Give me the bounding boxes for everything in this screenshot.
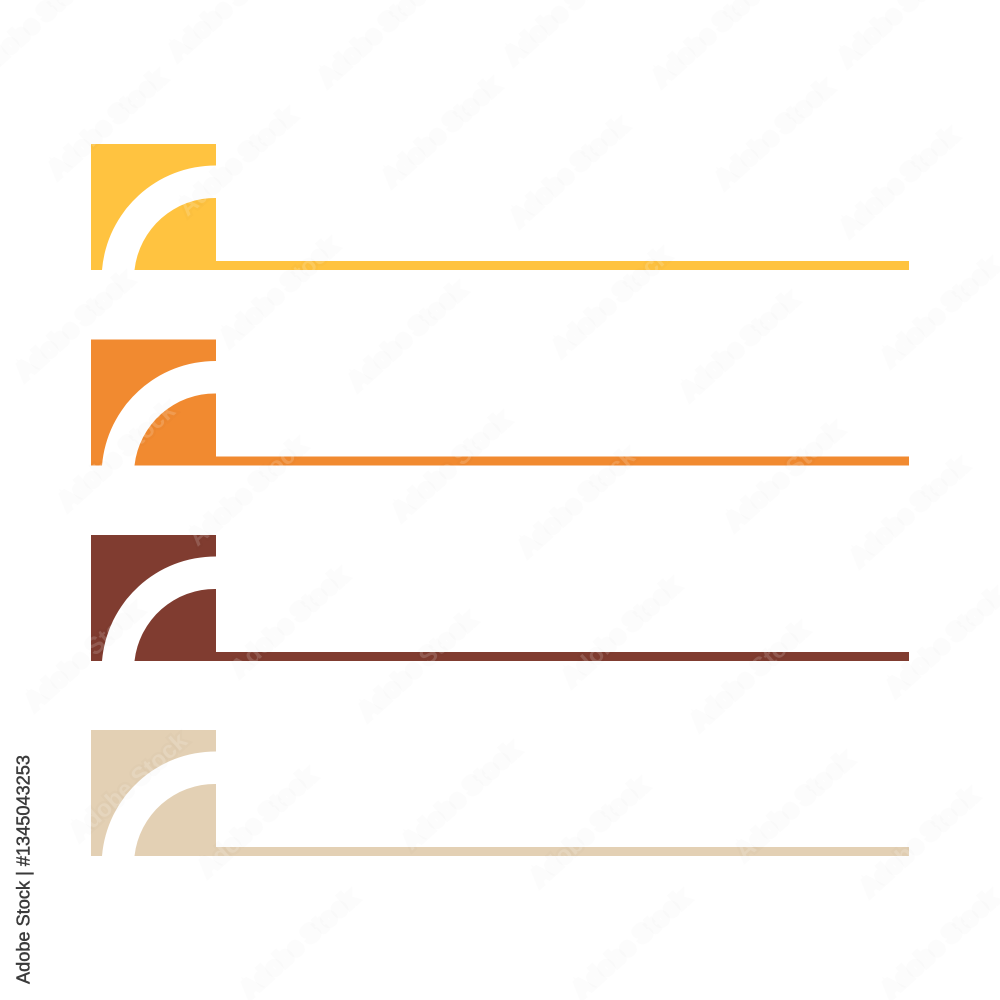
icon: yellow corner arcs xyxy=(91,144,216,270)
stock watermark pattern: Adobe Stock xyxy=(720,417,848,536)
orange rule xyxy=(216,456,909,466)
stock watermark pattern: Adobe Stock xyxy=(225,563,353,682)
icon: brown corner arcs xyxy=(91,535,216,661)
icon: beige corner arcs xyxy=(91,730,216,856)
stock watermark pattern: Adobe Stock xyxy=(505,113,633,232)
stock watermark pattern: Adobe Stock xyxy=(387,407,515,526)
stock watermark pattern: Adobe Stock xyxy=(235,885,363,1000)
icon: orange corner arcs xyxy=(91,340,216,466)
stock watermark pattern: Adobe Stock xyxy=(183,433,311,552)
stock watermark pattern: Adobe Stock xyxy=(730,747,858,866)
beige rule xyxy=(216,847,909,856)
side stock credit: Adobe Stock | #1345043253 xyxy=(14,755,34,984)
banner 2: orange xyxy=(91,340,909,466)
yellow rule xyxy=(216,261,909,270)
stock watermark pattern: Adobe Stock xyxy=(65,727,193,846)
stock watermark pattern: Adobe Stock xyxy=(343,277,471,396)
stock watermark pattern: Adobe Stock xyxy=(10,267,138,386)
stock watermark pattern: Adobe Stock xyxy=(53,397,181,516)
stock watermark pattern: Adobe Stock xyxy=(20,597,148,716)
stock watermark pattern: Adobe Stock xyxy=(835,123,963,242)
stock watermark pattern: Adobe Stock xyxy=(675,287,803,406)
stock watermark pattern: Adobe Stock xyxy=(353,607,481,726)
stock watermark pattern: Adobe Stock xyxy=(685,617,813,736)
banner 3: brown xyxy=(91,535,909,661)
stock watermark pattern: Adobe Stock xyxy=(43,65,171,184)
stock watermark pattern: Adobe Stock xyxy=(377,73,505,192)
stock watermark pattern: Adobe Stock xyxy=(525,773,653,892)
stock watermark pattern: Adobe Stock xyxy=(855,783,983,902)
stock watermark pattern: Adobe Stock xyxy=(173,103,301,222)
stock watermark pattern: Adobe Stock xyxy=(557,573,685,692)
banner 4: beige xyxy=(91,730,909,856)
stock watermark pattern: Adobe Stock xyxy=(397,737,525,856)
stock watermark pattern: Adobe Stock xyxy=(710,75,838,194)
brown rule xyxy=(216,652,909,661)
banner 1: yellow xyxy=(91,144,909,270)
stock watermark pattern: Adobe Stock xyxy=(876,253,1000,372)
stock watermark pattern: Adobe Stock xyxy=(215,233,343,352)
stock watermark pattern: Adobe Stock xyxy=(845,453,973,572)
stock watermark pattern: Adobe Stock xyxy=(547,243,675,362)
stock watermark pattern: Adobe Stock xyxy=(567,885,695,1000)
stock watermark pattern: Adobe Stock xyxy=(193,763,321,882)
stock watermark pattern: Adobe Stock xyxy=(513,443,641,562)
